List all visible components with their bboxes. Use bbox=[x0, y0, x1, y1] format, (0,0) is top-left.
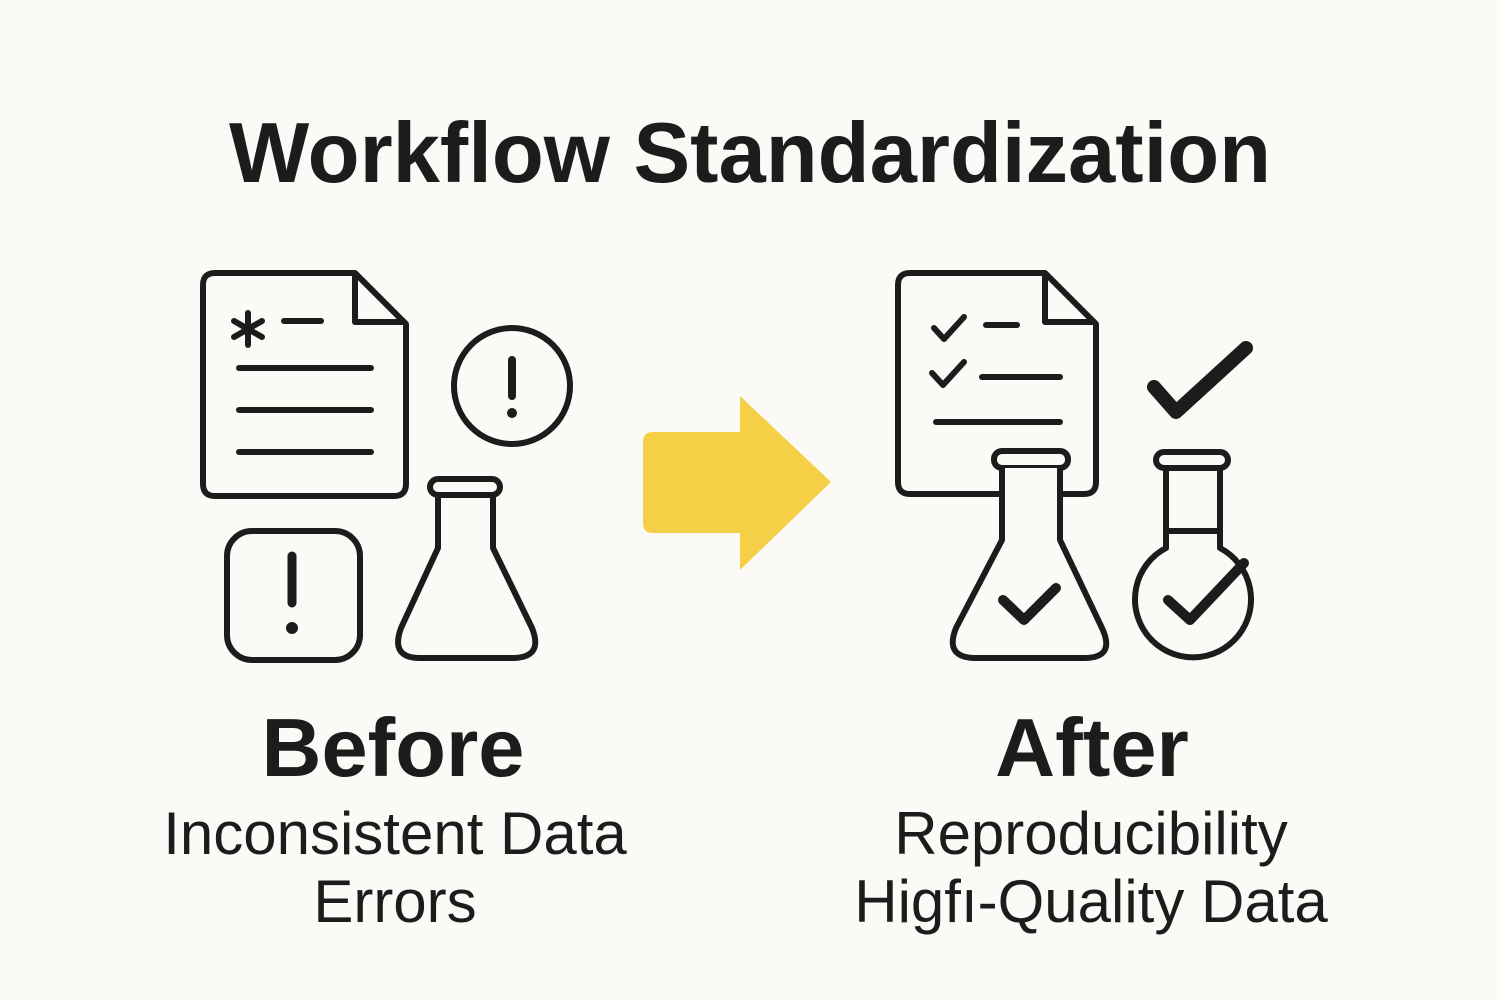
icon: circle exclamation bbox=[454, 328, 570, 444]
heading: after: After bbox=[995, 701, 1189, 794]
text: before description: Errors bbox=[313, 868, 477, 935]
icon: square exclamation bbox=[227, 531, 360, 660]
icon: after document bbox=[898, 273, 1096, 494]
icon: after flask with check bbox=[953, 451, 1106, 658]
text: before description: Inconsistent Data bbox=[163, 800, 627, 867]
text: after description: Higfı-Quality Data bbox=[854, 868, 1328, 935]
icon: round flask with check bbox=[1135, 452, 1251, 657]
icon: before document bbox=[203, 273, 406, 496]
title: Workflow Standardization bbox=[229, 106, 1271, 201]
icon: big check bbox=[1154, 348, 1246, 412]
heading: before: Before bbox=[262, 701, 524, 794]
icon: before flask bbox=[398, 479, 535, 658]
text: after description bbox=[854, 800, 1328, 935]
text: before description bbox=[163, 800, 627, 935]
text: after description: Reproducibility bbox=[894, 800, 1288, 867]
arrow bbox=[643, 396, 831, 570]
